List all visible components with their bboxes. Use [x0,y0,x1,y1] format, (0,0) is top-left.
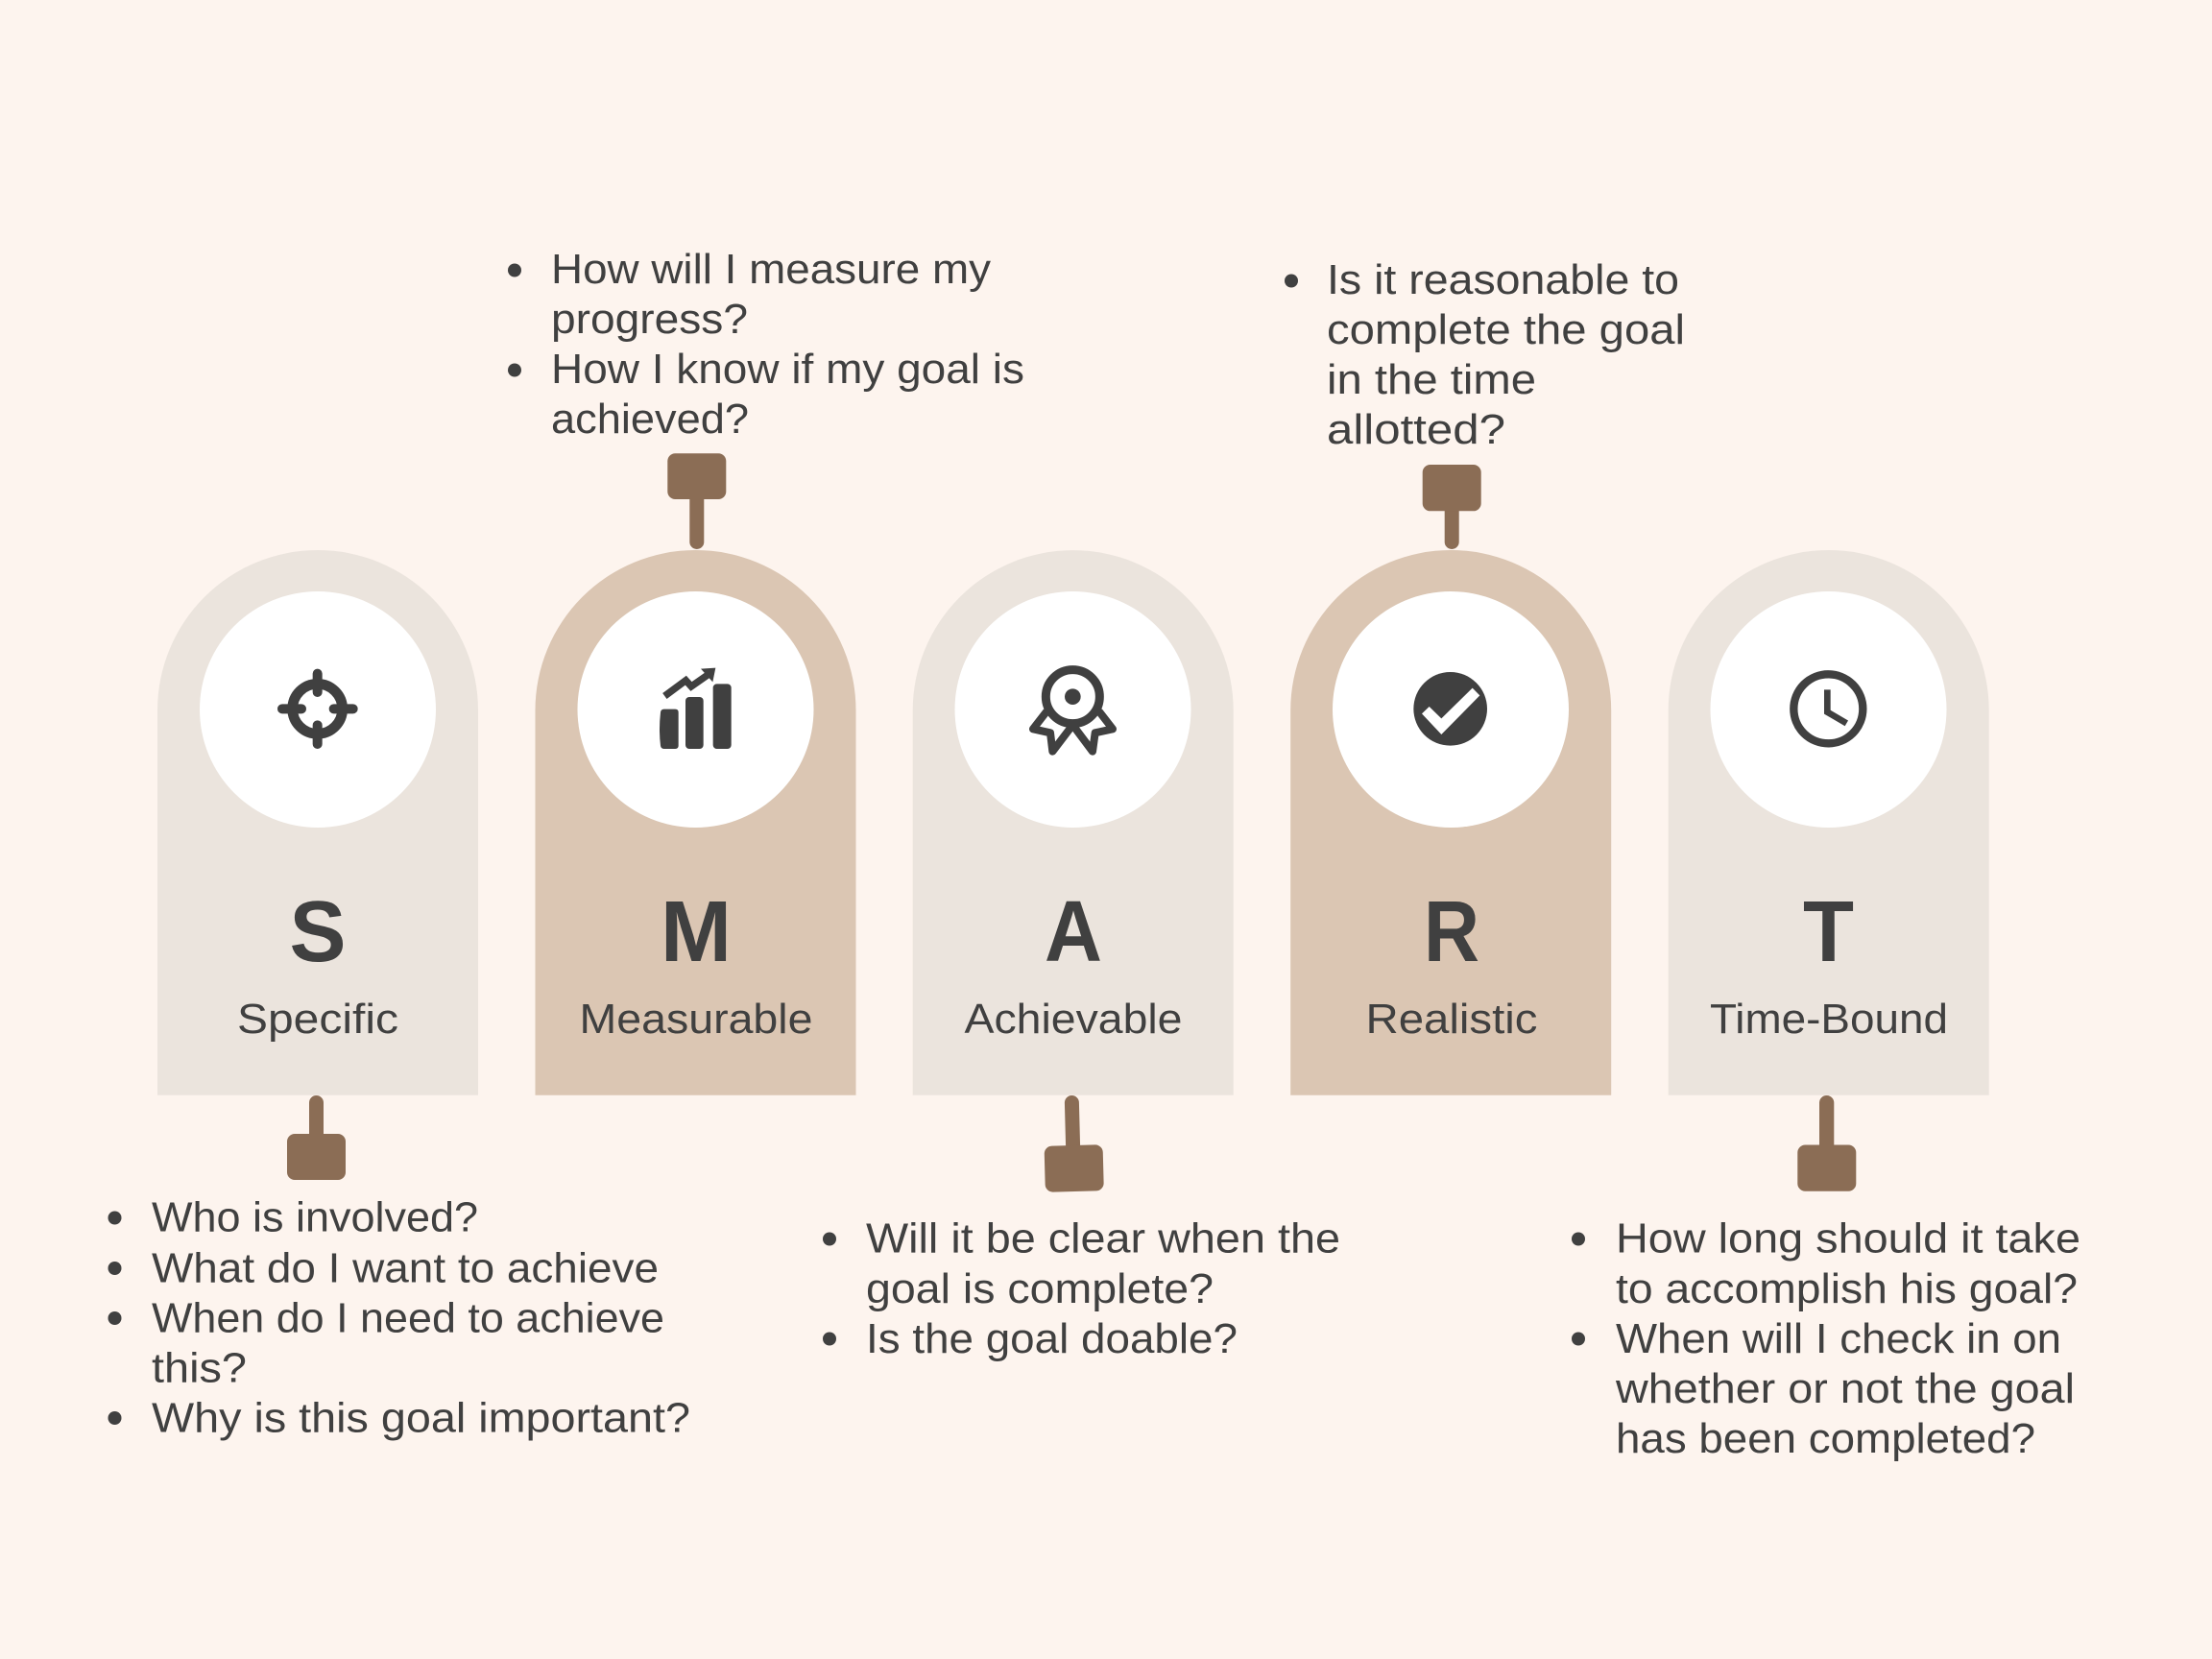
label: Measurable: Measurable [580,996,812,1043]
card: T [1669,550,1989,1095]
icon circle: S [200,591,436,828]
bullet list: R: allotted? [1327,406,1505,453]
pin: S [287,1095,346,1180]
letter T: T [1803,884,1854,980]
pin: T [1797,1095,1856,1191]
panel: A Achievable [823,550,1340,1362]
pin: M [667,453,726,549]
icon: check mark badge [1413,672,1487,746]
letter R: R [1424,884,1479,980]
panel: R Realistic [1285,256,1685,1095]
bullet list: M: progress? [551,296,748,343]
icon: rising bar chart [660,668,732,749]
bullet list: S: Who is involved? [152,1194,478,1240]
icon circle: T [1711,591,1947,828]
icon circle: R [1333,591,1569,828]
bullet list: T: How long should it take [1616,1215,2080,1262]
bullet list: T: to accomplish his goal? [1616,1265,2078,1312]
label: Realistic: Realistic [1365,996,1538,1043]
bullet list: M: achieved? [551,396,749,443]
bullet list: T: When will I check in on [1616,1315,2061,1362]
bullet list: M [508,246,1024,443]
letter M: M [661,884,732,980]
label: Specific: Specific [237,996,398,1043]
label: Achievable: Achievable [964,996,1183,1043]
bullet list: M: How will I measure my [551,246,991,293]
label: Time-Bound: Time-Bound [1710,996,1948,1043]
bullet list: R [1285,256,1685,453]
bullet list: M: How I know if my goal is [551,346,1024,393]
bullet list: S: Why is this goal important? [152,1394,690,1442]
panel: S Specific [108,550,690,1442]
bullet list: R: Is it reasonable to [1327,256,1679,303]
bullet list: S: What do I want to achieve [152,1244,659,1292]
card: A [913,550,1234,1095]
icon: award ribbon [1033,670,1113,752]
icon: clock [1793,674,1863,743]
panel: T Time-Bound [1572,550,2080,1462]
icon: crosshair target [282,674,353,744]
bullet list: A [823,1215,1340,1362]
letter A: A [1045,884,1102,980]
bullet list: A: goal is complete? [866,1265,1214,1312]
card: M [536,550,856,1095]
letter S: S [290,884,346,980]
bullet list: R: in the time [1327,356,1536,403]
icon circle: A [954,591,1190,828]
bullet list: T: whether or not the goal [1615,1365,2075,1412]
bullet list: S: this? [152,1344,247,1392]
bullet list: A: Will it be clear when the [866,1215,1340,1262]
pin: A [1043,1094,1104,1192]
bullet list: R: complete the goal [1327,306,1685,353]
pin: R [1423,465,1481,549]
bullet list: A: Is the goal doable? [866,1315,1238,1362]
bullet list: S: When do I need to achieve [152,1294,664,1342]
card: R [1290,550,1611,1095]
bullet list: T [1572,1215,2080,1462]
bullet list: T: has been completed? [1616,1415,2035,1462]
panel: M Measurable [508,246,1024,1095]
bullet list: S [108,1194,690,1442]
icon circle: M [578,591,814,828]
card: S [157,550,478,1095]
